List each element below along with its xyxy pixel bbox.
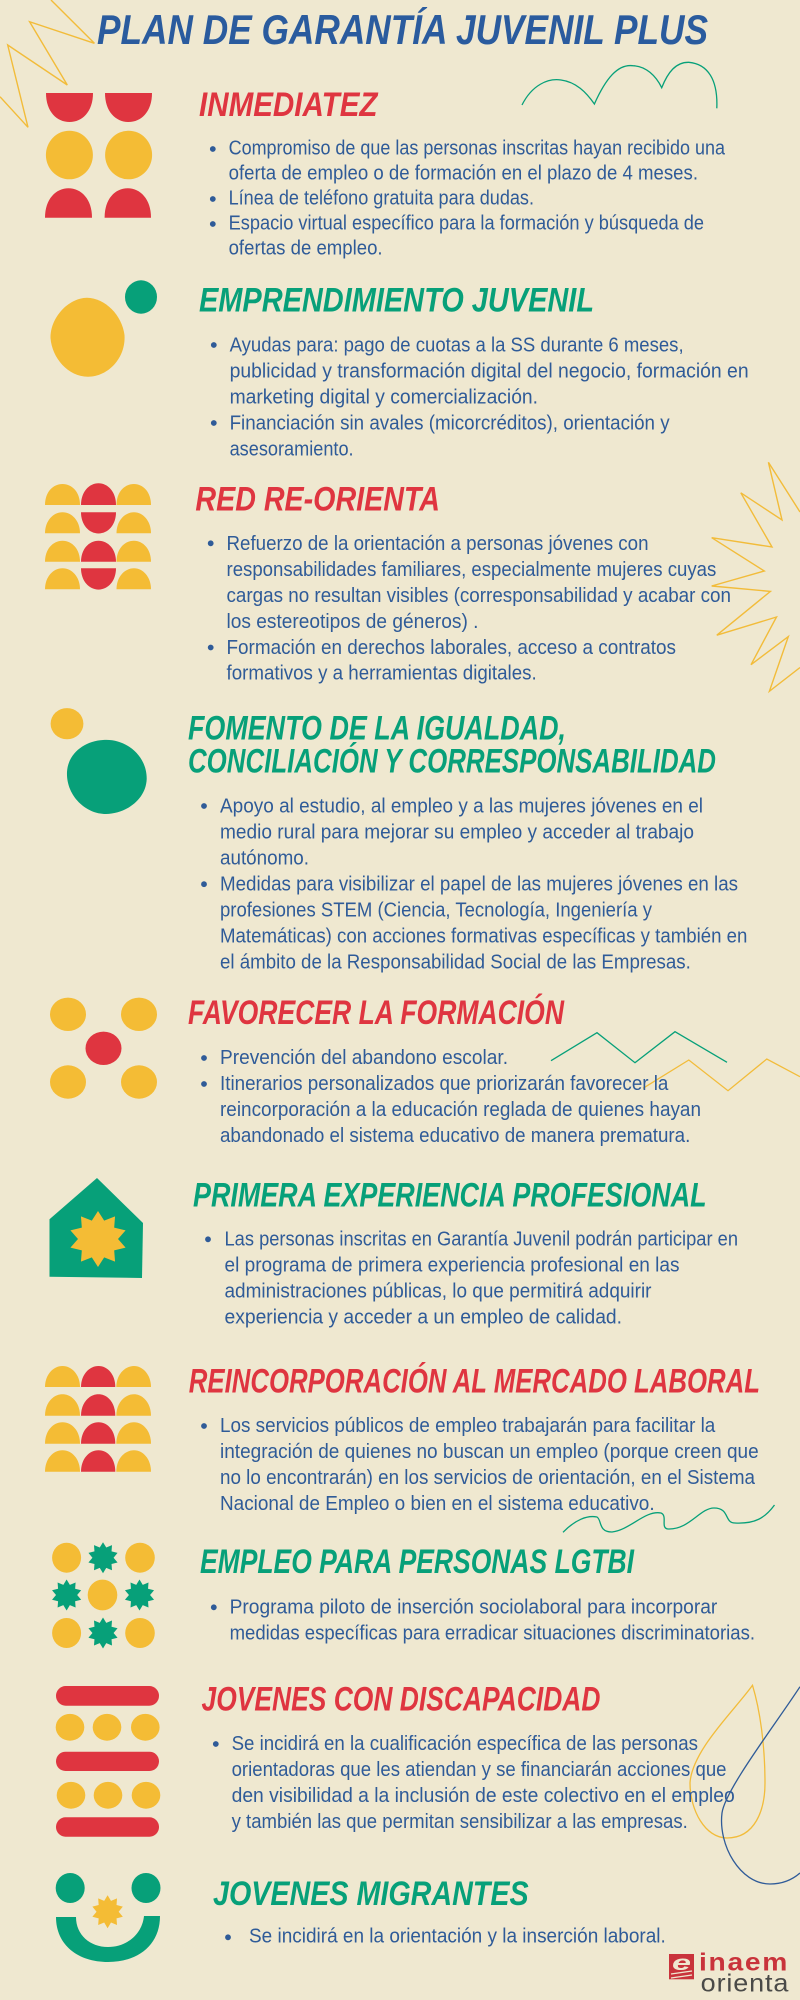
text block: fomento bullets: medio rural para mejorar su empleo y acceder al trabajo [220, 822, 694, 844]
text block: empleo lgtbi bullet [211, 1596, 755, 1644]
icon: yellow and green blobs [50, 280, 157, 377]
panel: red re-orienta [45, 480, 731, 685]
logo: inaem orienta: orienta [701, 1970, 789, 1998]
decoration: yellow star burst right [712, 462, 800, 691]
text block: inmediatez bullets: ofertas de empleo. [229, 237, 383, 259]
text block: red re-orienta bullets: formativos y a herramientas digitales. [226, 663, 537, 685]
text block: emprendimiento bullets: Ayudas para: pago de cuotas a la SS durante 6 meses, [230, 335, 684, 357]
text block: emprendimiento bullets: marketing digital y comercialización. [230, 387, 538, 409]
heading: jovenes con discapacidad: JOVENES CON DISCAPACIDAD [202, 1681, 600, 1719]
decoration: blue curve [722, 1687, 800, 1884]
text block: reincorporación bullet [201, 1415, 759, 1515]
text block: favorecer bullets: reincorporación a la educación reglada de quienes hayan [220, 1099, 701, 1121]
text block: fomento bullets: profesiones STEM (Ciencia, Tecnología, Ingeniería y [220, 900, 652, 922]
panel: jovenes migrantes [56, 1873, 666, 1962]
text block: inmediatez bullets: Espacio virtual específico para la formación y búsqueda de [229, 212, 704, 234]
text block: inmediatez bullets: oferta de empleo o de formación en el plazo de 4 meses. [229, 162, 698, 184]
panel: primera experiencia profesional [50, 1177, 738, 1328]
decoration: green zigzag middle right [551, 1032, 727, 1063]
icon: domes grid [45, 483, 151, 590]
text block: fomento bullets: Matemáticas) con acciones formativas específicas y también en [220, 926, 747, 948]
text block: favorecer bullets [201, 1047, 701, 1147]
text block: reincorporación bullet: Los servicios públicos de empleo trabajarán para facilitar la [220, 1415, 716, 1437]
text block: red re-orienta bullets: cargas no resultan visibles (corresponsabilidad y acabar con [226, 585, 731, 607]
text block: red re-orienta bullets [208, 533, 731, 685]
text block: empleo lgtbi bullet: medidas específicas para erradicar situaciones discriminatorias. [230, 1622, 755, 1644]
text block: discapacidad bullet: orientadoras que les atiendan y se financiarán acciones que [232, 1759, 726, 1781]
heading: empleo para personas lgtbi: EMPLEO PARA PERSONAS LGTBI [200, 1543, 635, 1581]
panel: fomento de la igualdad [51, 708, 747, 973]
icon: five dots [50, 998, 157, 1099]
text block: emprendimiento bullets: Financiación sin avales (micorcréditos), orientación y [230, 413, 670, 435]
text block: discapacidad bullet: Se incidirá en la cualificación específica de las personas [232, 1733, 698, 1755]
text block: emprendimiento bullets: asesoramiento. [230, 439, 354, 461]
heading: fomento de la igualdad: FOMENTO DE LA IGUALDAD, [188, 709, 566, 747]
heading: red re-orienta: RED RE-ORIENTA [195, 480, 440, 518]
text block: red re-orienta bullets: responsabilidades familiares, especialmente mujeres cuyas [226, 559, 716, 581]
text block: fomento bullets [201, 796, 747, 973]
decoration: green wave [563, 1505, 774, 1532]
icon: bowls and ovals [45, 93, 152, 218]
text block: migrantes bullet: Se incidirá en la orientación y la inserción laboral. [249, 1926, 666, 1948]
icon: smiling face [56, 1873, 160, 1962]
icon: red bars and yellow dots [56, 1686, 160, 1837]
text block: reincorporación bullet: Nacional de Empleo o bien en el sistema educativo. [220, 1493, 655, 1515]
decoration: yellow teardrop [690, 1685, 765, 1838]
panel: jovenes con discapacidad [56, 1681, 735, 1837]
icon: dots and stars grid [52, 1542, 155, 1648]
heading: favorecer la formación: FAVORECER LA FORMACIÓN [188, 994, 565, 1032]
heading: emprendimiento juvenil: EMPRENDIMIENTO JUVENIL [199, 282, 594, 320]
icon: domes grid [45, 1366, 151, 1472]
text block: favorecer bullets: Itinerarios personalizados que priorizarán favorecer la [220, 1073, 669, 1095]
text block: fomento bullets: Medidas para visibilizar el papel de las mujeres jóvenes en las [220, 874, 738, 896]
logo: inaem orienta: inaem [699, 1949, 789, 1977]
text block: inmediatez bullets: Línea de teléfono gratuita para dudas. [229, 187, 534, 209]
decoration: yellow zigzag top left [0, 0, 94, 127]
logo: inaem orienta [669, 1949, 789, 1998]
text block: discapacidad bullet: y también las que permitan sensibilizar a las empresas. [232, 1811, 688, 1833]
text block: red re-orienta bullets: Formación en derechos laborales, acceso a contratos [226, 637, 676, 659]
heading: fomento de la igualdad [188, 709, 716, 781]
text block: emprendimiento bullets: publicidad y transformación digital del negocio, formación en [230, 361, 749, 383]
text block: reincorporación bullet: integración de quienes no buscan un empleo (porque creen que [220, 1441, 759, 1463]
panel: inmediatez [45, 86, 726, 259]
text block: fomento bullets: el ámbito de la Responsabilidad Social de las Empresas. [220, 951, 691, 973]
decoration: yellow zigzag middle right [643, 1059, 800, 1091]
text block: primera experiencia bullet: el programa de primera experiencia profesional en las [224, 1254, 680, 1276]
panel: reincorporación al mercado laboral [45, 1363, 760, 1515]
logo: inaem orienta: e [672, 1952, 692, 1975]
text block: favorecer bullets: Prevención del abandono escolar. [220, 1047, 508, 1069]
panel: emprendimiento juvenil [50, 280, 749, 461]
text block: primera experiencia bullet: administraciones públicas, lo que permitirá adquirir [224, 1280, 652, 1302]
text block: inmediatez bullets [210, 137, 726, 259]
heading: inmediatez: INMEDIATEZ [199, 86, 379, 124]
text block: primera experiencia bullet [205, 1228, 738, 1328]
panel: empleo para personas lgtbi [52, 1542, 755, 1648]
text block: discapacidad bullet: den visibilidad a la inclusión de este colectivo en el empleo [232, 1785, 735, 1807]
text block: empleo lgtbi bullet: Programa piloto de inserción sociolaboral para incorporar [230, 1596, 718, 1618]
text block: discapacidad bullet [213, 1733, 735, 1833]
text block: red re-orienta bullets: los estereotipos de géneros) . [226, 611, 478, 633]
text block: favorecer bullets: abandonado el sistema educativo de manera prematura. [220, 1125, 690, 1147]
panel: favorecer la formación [50, 994, 701, 1147]
icon: yellow and green blobs [51, 708, 147, 814]
decoration: green arcs top right [522, 62, 717, 108]
text block: emprendimiento bullets [211, 335, 749, 461]
text block: red re-orienta bullets: Refuerzo de la orientación a personas jóvenes con [226, 533, 648, 555]
text block: fomento bullets: Apoyo al estudio, al empleo y a las mujeres jóvenes en el [220, 796, 703, 818]
text block: primera experiencia bullet: Las personas inscritas en Garantía Juvenil podrán participar en [224, 1228, 738, 1250]
text block: reincorporación bullet: no lo encontrarán) en los servicios de orientación, en el Sistema [220, 1467, 756, 1489]
text block: inmediatez bullets: Compromiso de que las personas inscritas hayan recibido una [229, 137, 726, 159]
heading: jovenes migrantes: JOVENES MIGRANTES [213, 1875, 529, 1913]
text block: fomento bullets: autónomo. [220, 848, 309, 870]
text block: primera experiencia bullet: experiencia y acceder a un empleo de calidad. [224, 1306, 622, 1328]
icon: green house with yellow star [50, 1178, 143, 1278]
